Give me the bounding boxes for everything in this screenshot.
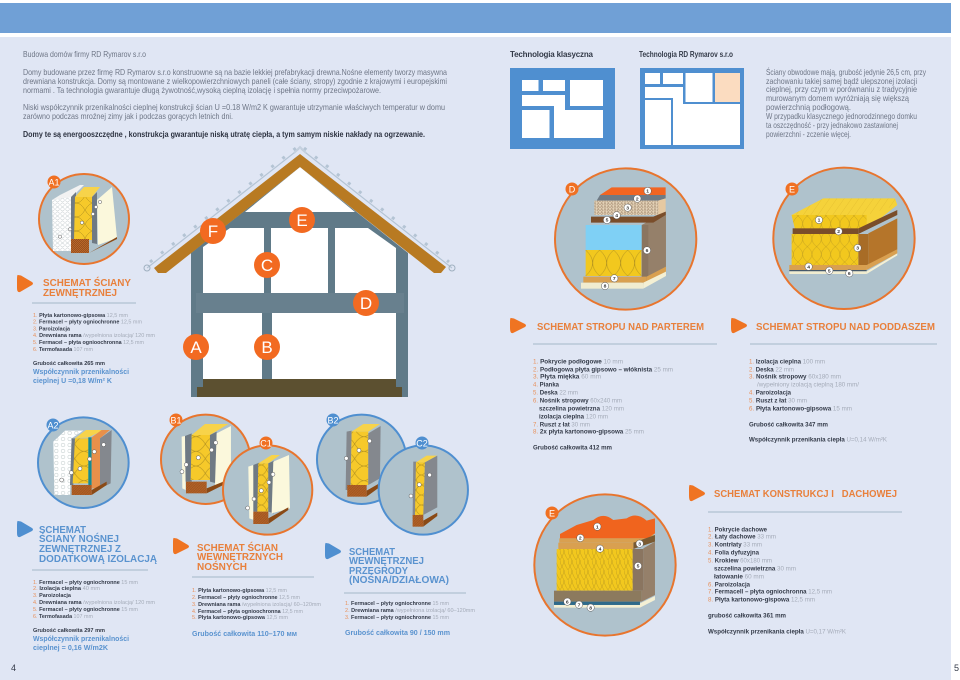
- badge roof E: E: [549, 508, 555, 518]
- diagram E: 6: [848, 271, 851, 277]
- ceiling list D: 1. Pokrycie podłogowe 10 mm: [533, 358, 623, 365]
- ceiling list D: 5. Deska 22 mm: [533, 389, 578, 396]
- heading: exterior wall: ZEWNĘTRZNEJ: [43, 287, 117, 299]
- list A2: 6. Termofasada 107 mm: [33, 614, 93, 620]
- diagram roof: 7: [578, 602, 581, 608]
- ceiling list E: 3. Nośnik stropowy 60x180 mm: [749, 373, 841, 380]
- heading: load-bearing wall with insulation: [17, 521, 157, 565]
- tile line: [144, 147, 455, 271]
- heading: interior partition: SCHEMAT: [349, 546, 396, 558]
- diagram D: 6: [646, 248, 649, 254]
- diagram B1: [161, 415, 250, 504]
- roof list: grubość całkowita 361 mm: [708, 612, 786, 619]
- diagram A2: [38, 417, 129, 508]
- roof list: 2. Łaty dachowe 33 mm: [708, 533, 776, 540]
- diagram E: 1: [818, 218, 821, 224]
- heading: ceiling over ground floor: [510, 318, 704, 333]
- heading: Technologia RD Rymarov: Technologia RD Rymarov s.r.o: [639, 50, 733, 59]
- diagram E: 3: [856, 246, 859, 252]
- ground slab: [197, 379, 402, 397]
- diagram D: 1: [646, 189, 649, 195]
- badge F: F: [208, 222, 218, 241]
- intro text block: zarówno podczas mroźnej zimy jak i podczas gorących letnich dni.: [23, 111, 233, 121]
- badge D small: [566, 182, 578, 196]
- badge C: [254, 252, 280, 278]
- exterior wall list: 2. Fermacel – płyty ogniochronne 12,5 mm: [33, 320, 142, 326]
- heading: roof construction: [689, 485, 897, 501]
- ceiling list D: 4. Pianka: [533, 381, 559, 388]
- badge D small: D: [569, 184, 576, 194]
- diagram D: 5: [606, 218, 609, 224]
- ceiling list D: 2. Podłogowa płyta gipsowo – włóknista 25 mm: [533, 366, 673, 373]
- floor plan: RD Rymarov technology: [640, 68, 744, 149]
- list A2: [33, 580, 155, 652]
- list B1 C1: Grubość całkowita 110–170 мм: [192, 629, 297, 638]
- badge C1: C1: [260, 438, 272, 448]
- list B2 C2: 1. Fermacel – płyty ogniochronne 15 mm: [345, 601, 449, 607]
- exterior wall list: 6. Termofasada 107 mm: [33, 347, 93, 353]
- list A2: 3. Paroizolacja: [33, 593, 72, 599]
- badge E small: E: [789, 184, 795, 194]
- roof list: 5. Krokiew 60x180 mm: [708, 557, 772, 564]
- diagram roof: 6: [566, 599, 569, 605]
- heading: load-bearing wall with insulation: ZEWNĘTRZNEJ Z: [39, 543, 122, 555]
- badge A2: A2: [47, 420, 59, 430]
- diagram D: 3: [626, 205, 629, 211]
- heading: interior partition: [325, 543, 449, 586]
- roof list: szczelina powietrzna 30 mm: [714, 565, 796, 572]
- diagram D: 7: [613, 276, 616, 282]
- list A2: Współczynnik przenikalności: [33, 634, 129, 643]
- diagram D: 4: [615, 213, 618, 219]
- heading: interior partition: (NOŚNA/DZIAŁOWA): [349, 573, 449, 586]
- comparison text: zachowaniu takiej samej bądź ulepszonej izolacji: [766, 76, 917, 86]
- badge C1: [260, 436, 272, 450]
- list B2 C2: 2. Drewniana rama /wypełniona izolacją/ 60–120mm: [345, 608, 475, 614]
- heading: roof construction: SCHEMAT KONSTRUKCJ I DACHOWEJ: [714, 488, 897, 500]
- diagram D: 8: [604, 284, 607, 290]
- list A2: cieplnej = 0,16 W/m2K: [33, 643, 109, 652]
- badge C2: [416, 436, 428, 450]
- list B2 C2: 3. Fermacel – płyty ogniochronne 15 mm: [345, 615, 449, 621]
- list A2: 4. Drewniana rama /wypełniona izolacją/ 120 mm: [33, 600, 155, 606]
- list B1 C1: 3. Drewniana rama /wypełniona izolacją/ 60–120mm: [192, 602, 321, 608]
- badge A: [183, 334, 209, 360]
- intro text block: Niski współczynnik przenikalności cieplnej konstrukcji ścian U =0.18 W/m2 K gwarantuje utrzymanie właściwych temperatur w domu: [23, 102, 445, 112]
- top header band: [0, 3, 951, 33]
- diagram roof: 2: [579, 536, 582, 542]
- list B1 C1: 5. Płyta kartonowo-gipsowa 12,5 mm: [192, 615, 288, 621]
- house cross-section: [144, 147, 455, 397]
- diagram E: 4: [807, 264, 810, 270]
- intro text block: Budowa domów firmy RD Rymarov s.r.o: [23, 49, 146, 59]
- badge C2: C2: [416, 438, 428, 448]
- heading: interior load-bearing walls: WEWNĘTRZNYCH: [197, 551, 283, 563]
- ceiling list E: 1. Izolacja cieplna 100 mm: [749, 358, 825, 365]
- diagram E: 5: [828, 268, 831, 274]
- heading: interior load-bearing walls: SCHEMAT ŚCIAN: [197, 541, 278, 554]
- page number 5: 5: [954, 663, 959, 673]
- floor plan: classic technology: [510, 68, 615, 149]
- badge E small: [786, 182, 798, 196]
- intro text block: drewniana konstrukcja. Domy są montowane z wielkopowierzchniowych paneli (całe ściany, stropy) zgodnie z krajowymi i europejskimi: [23, 76, 447, 86]
- ceiling list D: 3. Płyta miękka 60 mm: [533, 373, 601, 380]
- badge roof E: [546, 506, 558, 520]
- heading: exterior wall: SCHEMAT ŚCIANY: [43, 276, 131, 289]
- list A2: 2. Izolacja cieplna 40 mm: [33, 586, 100, 592]
- comparison text: murowanym domem wyróżniają się większą: [766, 93, 909, 103]
- badge B2: B2: [327, 416, 339, 426]
- list B1 C1: 1. Płyta kartonowo-gipsowa 12,5 mm: [192, 588, 287, 594]
- heading: ceiling under attic: SCHEMAT STROPU NAD PODDASZEM: [756, 321, 935, 333]
- heading: interior load-bearing walls: [173, 538, 283, 573]
- intro text block: Domy te są energooszczędne , konstrukcja gwarantuje niską utratę ciepła, a tym samym niskie nakłady na ogrzewanie.: [23, 129, 425, 139]
- badge F: [200, 218, 226, 244]
- diagram E: 2: [837, 229, 840, 235]
- comparison text: W przypadku klasycznego jednorodzinnego domku: [766, 111, 917, 121]
- badge D: [353, 290, 379, 316]
- badge D: D: [360, 294, 372, 313]
- exterior wall list: 1. Płyta kartonowo-gipsowa 12,5 mm: [33, 313, 128, 319]
- list B2 C2: Grubość całkowita 90 / 150 mm: [345, 628, 450, 637]
- ceiling list D: 7. Ruszt z łat 30 mm: [533, 421, 590, 428]
- diagram B2: [317, 415, 406, 504]
- heading: load-bearing wall with insulation: SCHEMAT: [39, 524, 87, 536]
- frame: [191, 167, 408, 397]
- comparison text: powierzchnią podłogową.: [766, 102, 851, 112]
- list B1 C1: [192, 588, 321, 638]
- comparison text: cieplnej, przy czym w porównaniu z tradycyjnie: [766, 84, 917, 94]
- badge A2: [46, 418, 60, 432]
- diagram roof: 1: [596, 524, 599, 530]
- list A2: 5. Fermacel – płyty ogniochronne 15 mm: [33, 607, 138, 613]
- page number 4: 4: [11, 663, 16, 673]
- badge A: A: [190, 338, 202, 357]
- badge B: B: [261, 338, 273, 357]
- roof list: 1. Pokrycie dachowe: [708, 526, 767, 533]
- diagram D: 2: [636, 196, 639, 202]
- ceiling list E: Współczynnik przenikania ciepła U=0,14 W/m²K: [749, 436, 888, 443]
- ceiling list D: [533, 358, 673, 451]
- ceiling list E: /wypełniony izolacją cieplną 180 mm/: [757, 381, 859, 388]
- comparison text: ta oszczędność - przy jednakowo zastawionej: [766, 120, 898, 130]
- diagram roof: [534, 494, 676, 636]
- heading: interior partition: PRZEGRODY: [349, 565, 408, 577]
- diagram E: [773, 168, 915, 309]
- exterior wall list: Grubość całkowita 265 mm: [33, 361, 105, 367]
- list B1 C1: 4. Fermacel – płyta ognioochronna 12,5 mm: [192, 609, 303, 615]
- ceiling list E: 2. Deska 22 mm: [749, 366, 794, 373]
- heading: load-bearing wall with insulation: DODATKOWĄ IZOLACJĄ: [39, 553, 157, 565]
- exterior wall list: [33, 313, 155, 385]
- exterior wall list: 3. Paroizolacja: [33, 326, 71, 332]
- intro text block: Domy budowane przez firmę RD Rymarov s.r.o konstruowne są na bazie lekkiej prefabrykacji drewna.Nośne elementy tworzy masywna: [23, 67, 447, 77]
- diagram roof: 3: [638, 541, 641, 547]
- diagram C2: [379, 445, 468, 535]
- badge E: E: [296, 211, 308, 230]
- comparison text: powierzchni - zczenie więcej.: [766, 129, 851, 139]
- list A2: Grubość całkowita 297 mm: [33, 628, 105, 634]
- ceiling list E: Grubość całkowita 347 mm: [749, 421, 828, 428]
- floor beam: [196, 293, 404, 313]
- heading: ceiling over ground floor: SCHEMAT STROPU NAD PARTEREM: [537, 321, 704, 333]
- ceiling list E: 5. Ruszt z łat 30 mm: [749, 397, 807, 404]
- ceiling list D: 6. Nośnik stropowy 60x240 mm: [533, 397, 622, 404]
- ceiling list D: Grubość całkowita 412 mm: [533, 444, 612, 451]
- list A2: 1. Fermacel – płyty ogniochronne 15 mm: [33, 580, 138, 586]
- heading: load-bearing wall with insulation: ŚCIANY NOŚNEJ: [39, 532, 119, 545]
- exterior wall list: Współczynnik przenikalności: [33, 367, 129, 376]
- diagram roof: 4: [599, 546, 602, 552]
- diagram roof: 8: [589, 605, 592, 611]
- badge A1: A1: [48, 178, 60, 188]
- badge B2: [326, 414, 340, 426]
- list B2 C2: [345, 601, 475, 637]
- roof list: łatowanie 60 mm: [714, 573, 764, 580]
- badge E: [289, 207, 315, 233]
- roof list: 4. Folia dyfuzyjna: [708, 549, 759, 556]
- roof list: [708, 526, 847, 635]
- heading: Technologia klasyczna: Technologia klasyczna: [510, 50, 594, 59]
- badge C: C: [261, 256, 273, 275]
- intro text block: [23, 49, 447, 139]
- heading: ceiling under attic: [731, 318, 935, 333]
- ceiling list E: [749, 358, 888, 443]
- roof list: 6. Paroizolacja: [708, 581, 750, 588]
- ceiling list E: 4. Paroizolacja: [749, 389, 791, 396]
- intro text block: normami . Ta technologia gwarantuje długą żywotność,wysoką cieplną izolację i spełnia normy przeciwpożarowe.: [23, 85, 381, 95]
- diagram D: [555, 168, 696, 310]
- exterior wall list: 5. Fermacel – płyta ognioochronna 12,5 mm: [33, 340, 144, 346]
- list B1 C1: 2. Fermacel – płyty ogniochronne 12,5 mm: [192, 595, 300, 601]
- exterior wall list: cieplnej U =0,18 W/m² K: [33, 376, 113, 385]
- ceiling list E: 6. Płyta kartonowo-gipsowa 15 mm: [749, 405, 852, 412]
- heading: interior partition: WEWNĘTRZNEJ: [349, 555, 424, 567]
- comparison text: [766, 66, 927, 139]
- ceiling list D: izolacja cieplna 120 mm: [539, 413, 608, 420]
- roof list: 3. Kontrłaty 33 mm: [708, 541, 762, 548]
- roof: [154, 154, 446, 273]
- rooms: [203, 167, 396, 379]
- ceiling list D: szczelina powietrzna 120 mm: [539, 405, 624, 412]
- diagram C1: [223, 445, 312, 535]
- badge B1: B1: [170, 416, 182, 426]
- roof list: 7. Fermacell – płyta ogniochronna 12,5 mm: [708, 588, 832, 595]
- heading: exterior wall: [17, 275, 131, 299]
- badge B: [254, 334, 280, 360]
- diagram A1: [39, 174, 129, 264]
- roof list: 8. Płyta kartonowo-gispowa 12,5 mm: [708, 596, 815, 603]
- roof list: Współczynnik przenikania ciepła U=0,17 W/m²K: [708, 628, 847, 635]
- badge B1: [170, 414, 182, 426]
- ceiling list D: 8. 2x płyta kartonowo-gipsowa 25 mm: [533, 428, 644, 435]
- exterior wall list: 4. Drewniana rama /wypełniona izolacją/ 120 mm: [33, 333, 155, 339]
- diagram roof: 5: [637, 564, 640, 570]
- heading: interior load-bearing walls: NOŚNYCH: [197, 560, 247, 573]
